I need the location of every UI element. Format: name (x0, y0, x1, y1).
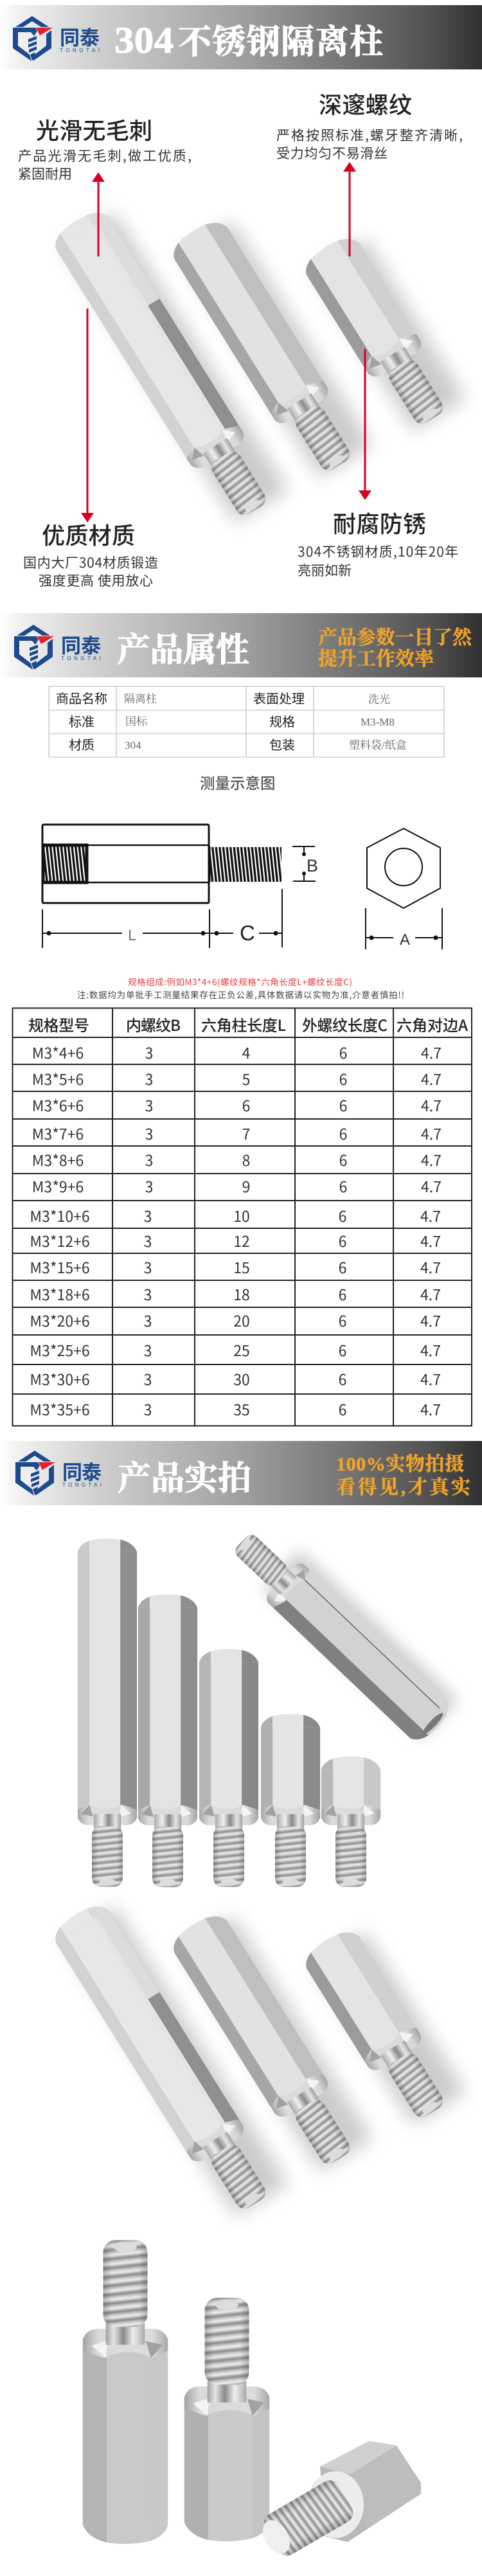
product photo: three angled standoffs (49, 201, 466, 527)
product photo: angled standoff (224, 1517, 460, 1746)
diagram: hexagon end view (366, 828, 442, 949)
table data rows: 3 (145, 1094, 153, 1116)
table data rows: 6 (339, 1204, 346, 1226)
table data rows: 4.7 (421, 1094, 442, 1116)
table header row: 六角对边A (397, 1013, 468, 1035)
product photo: five standoffs by length (78, 1539, 380, 1887)
table data rows: 6 (339, 1041, 347, 1063)
note: specification composition: 规格组成:例如M3*4+6(螺纹规格*六角长度L+螺纹长度C) (128, 975, 352, 988)
title: 产品属性 (117, 632, 249, 669)
slogan (318, 627, 473, 670)
callout: 优质材质: 强度更高 使用放心 (39, 571, 153, 590)
table data rows: M3*15+6 (30, 1256, 90, 1278)
note: measurement disclaimer: 注:数据均为单批手工测量结果存在正负公差,具体数据请以实物为准,介意者慎拍!! (77, 988, 404, 1001)
title (114, 19, 383, 61)
table data rows: 7 (242, 1122, 250, 1144)
table data rows: 6 (339, 1149, 347, 1170)
table data rows (30, 1041, 442, 1420)
product photo: medium upright standoff (184, 2298, 269, 2541)
callout: 耐腐防锈: 耐腐防锈 (333, 506, 426, 539)
table data rows: 25 (233, 1339, 250, 1361)
slogan: 产品参数一目了然 (318, 627, 473, 648)
table data rows: M3*4+6 (32, 1041, 84, 1063)
table data rows: 30 (233, 1368, 250, 1390)
diagram: side view with dimensions (42, 825, 318, 948)
slogan: 看得见,才真实 (336, 1477, 471, 1498)
callout: 优质材质 (23, 517, 158, 590)
attributes table: M3-M8 (361, 716, 395, 728)
table data rows: 4.7 (420, 1283, 441, 1305)
brand name: 同泰 (62, 1456, 102, 1485)
table data rows: 4 (242, 1041, 251, 1063)
arrow: up to 深邃螺纹 (343, 162, 356, 256)
table data rows: 4.7 (420, 1204, 441, 1226)
table data rows: 4.7 (420, 1398, 441, 1420)
diagram: side view with dimensions: B (307, 856, 318, 875)
table data rows: 4.7 (420, 1256, 441, 1278)
attributes table: 表面处理 (253, 688, 305, 707)
callout: 光滑无毛刺: 紧固耐用 (18, 164, 72, 183)
table data rows: 4.7 (421, 1041, 442, 1063)
table data rows: 3 (145, 1149, 153, 1170)
heading: 测量示意图: 测量示意图 (200, 771, 275, 793)
table data rows: 4.7 (421, 1175, 442, 1197)
slogan: 提升工作效率 (318, 648, 434, 670)
table data rows: M3*5+6 (32, 1068, 84, 1089)
table data rows: M3*25+6 (30, 1339, 90, 1361)
table data rows: 6 (339, 1339, 346, 1361)
table data rows: 4.7 (420, 1309, 441, 1331)
table data rows: 5 (242, 1068, 250, 1089)
table data rows: 15 (233, 1256, 250, 1278)
attributes table: 304 (125, 739, 141, 751)
product photo: short standoff lying down (254, 2441, 421, 2563)
brand name: TONGTAI (61, 656, 101, 661)
table data rows: 6 (339, 1175, 347, 1197)
table header row: 六角柱长度L (201, 1013, 286, 1035)
slogan: 100%实物拍摄 (336, 1454, 464, 1475)
table header row: 规格型号 (28, 1013, 89, 1035)
attributes table: 商品名称 (56, 688, 107, 707)
attributes table (49, 686, 444, 757)
table data rows: 9 (242, 1175, 250, 1197)
table data rows: 8 (242, 1149, 250, 1170)
callout: 深邃螺纹: 深邃螺纹 (319, 87, 412, 120)
table data rows: M3*7+6 (32, 1122, 84, 1144)
callout: 耐腐防锈 (298, 506, 458, 580)
table data rows: 6 (339, 1094, 347, 1116)
table data rows: 3 (145, 1175, 153, 1197)
slogan (336, 1454, 471, 1498)
table data rows: 12 (233, 1230, 250, 1251)
table data rows: M3*30+6 (30, 1368, 90, 1390)
attributes table: 材质 (69, 735, 94, 753)
brand name: 同泰 (61, 630, 101, 659)
specification table (12, 1008, 472, 1426)
arrow: down to 耐腐防锈 (359, 349, 371, 500)
diagram: side view with dimensions: C (240, 921, 255, 945)
table data rows: 10 (233, 1204, 250, 1226)
table data rows: 3 (145, 1041, 153, 1063)
table data rows: 20 (233, 1309, 250, 1331)
table data rows: 3 (144, 1368, 152, 1390)
table data rows: M3*18+6 (30, 1283, 90, 1305)
attributes table: 洗光 (368, 693, 390, 706)
table data rows: 3 (144, 1339, 152, 1361)
header banner: 304不锈钢隔离柱 (0, 5, 482, 69)
callout: 优质材质: 国内大厂304材质锻造 (23, 553, 158, 572)
table data rows: 6 (339, 1230, 346, 1251)
table data rows: 6 (339, 1309, 346, 1331)
callout: 深邃螺纹: 受力均匀不易滑丝 (276, 143, 388, 163)
attributes table: 规格 (269, 711, 295, 730)
product photo: tall upright standoff (83, 2240, 168, 2544)
arrow: up to 光滑无毛刺 (92, 172, 105, 256)
table data rows: 4.7 (421, 1068, 442, 1089)
table data rows: M3*8+6 (32, 1149, 84, 1170)
table data rows: 4.7 (420, 1368, 441, 1390)
title: 304 (114, 19, 174, 61)
brand name: 同泰 (60, 22, 100, 51)
callout: 耐腐防锈: 304不锈钢材质,10年20年 (298, 542, 458, 561)
callout: 优质材质: 优质材质 (42, 517, 135, 551)
table data rows: 3 (144, 1230, 152, 1251)
table data rows: 35 (233, 1398, 250, 1420)
table data rows: 6 (339, 1398, 346, 1420)
table data rows: M3*9+6 (32, 1175, 84, 1197)
table data rows: 18 (233, 1283, 250, 1305)
table data rows: 3 (144, 1309, 152, 1331)
table data rows: M3*12+6 (30, 1230, 90, 1251)
table data rows: M3*6+6 (32, 1094, 84, 1116)
brand name: TONGTAI (60, 48, 100, 53)
header banner: 产品实拍 (0, 1441, 482, 1505)
table data rows: 3 (145, 1122, 153, 1144)
icon: Tongtai logo (13, 16, 53, 61)
table data rows: 6 (242, 1094, 250, 1116)
title: 产品实拍 (118, 1460, 251, 1498)
diagram: side view with dimensions: L (128, 927, 136, 944)
table data rows: 6 (339, 1068, 347, 1089)
attributes table: 包装 (269, 735, 295, 753)
product photo: three angled standoffs (repeat) (49, 1895, 466, 2221)
table data rows: 4.7 (421, 1149, 442, 1170)
table data rows: M3*20+6 (30, 1309, 90, 1331)
attributes table: 塑料袋/纸盒 (349, 739, 407, 751)
callout: 深邃螺纹: 严格按照标准,螺牙整齐清晰, (276, 125, 463, 145)
table data rows: 4.7 (420, 1339, 441, 1361)
table data rows: 4.7 (420, 1230, 441, 1251)
table header row: 内螺纹B (126, 1013, 181, 1035)
attributes table: 国标 (125, 715, 148, 728)
diagram: hexagon end view: A (400, 931, 410, 949)
table data rows: 6 (339, 1283, 346, 1305)
header banner: 产品属性 (0, 613, 482, 677)
table data rows: 3 (144, 1256, 152, 1278)
brand name: TONGTAI (62, 1482, 102, 1488)
table data rows: M3*35+6 (30, 1398, 90, 1420)
icon: Tongtai logo (15, 1451, 55, 1496)
table data rows: 6 (339, 1256, 346, 1278)
table header row: 外螺纹长度C (302, 1013, 388, 1035)
table data rows: 6 (339, 1368, 346, 1390)
arrow: down to 优质材质 (81, 309, 94, 523)
callout: 光滑无毛刺 (18, 112, 192, 183)
table data rows: M3*10+6 (30, 1204, 90, 1226)
callout: 光滑无毛刺: 产品光滑无毛刺,做工优质, (18, 146, 192, 165)
icon: Tongtai logo (14, 625, 54, 670)
table data rows: 4.7 (421, 1122, 442, 1144)
title: 不锈钢隔离柱 (178, 24, 383, 61)
callout: 深邃螺纹 (276, 87, 463, 163)
table data rows: 3 (144, 1204, 152, 1226)
table data rows: 6 (339, 1122, 347, 1144)
callout: 耐腐防锈: 亮丽如新 (298, 560, 352, 580)
table header row (28, 1013, 468, 1035)
table data rows: 3 (145, 1068, 153, 1089)
callout: 光滑无毛刺: 光滑无毛刺 (36, 112, 152, 146)
table data rows: 3 (144, 1283, 152, 1305)
attributes table: 隔离柱 (124, 693, 157, 705)
table data rows: 3 (144, 1398, 152, 1420)
attributes table: 标准 (69, 711, 94, 730)
